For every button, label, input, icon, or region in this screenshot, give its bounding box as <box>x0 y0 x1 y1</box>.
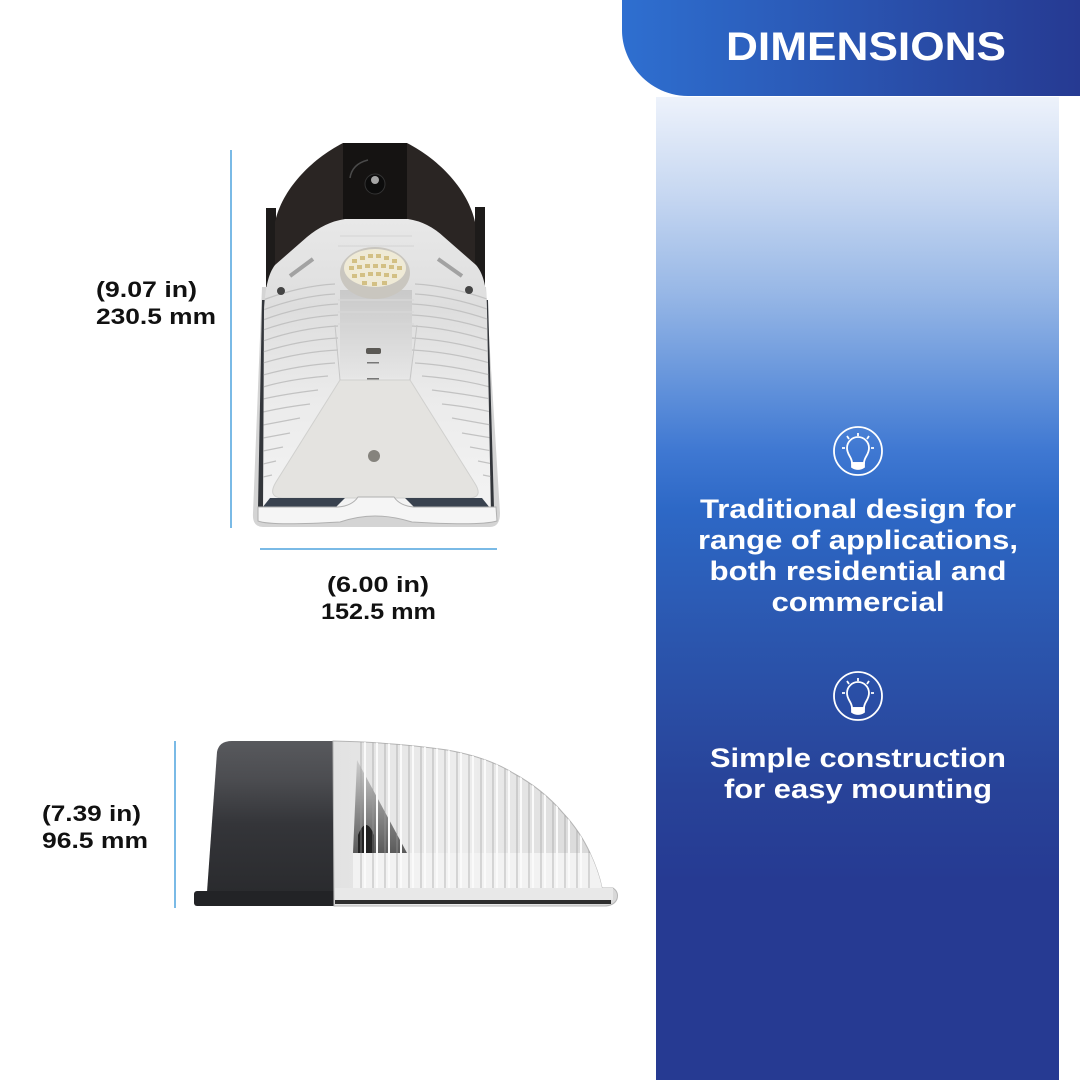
text: traditional design: commercial <box>772 587 944 617</box>
text: simple construction <box>710 743 1006 804</box>
label: width <box>321 572 436 624</box>
text: traditional design: range of applications, <box>698 525 1018 555</box>
product photo: front view of wall light <box>253 143 500 527</box>
icon: light bulb <box>834 672 882 720</box>
dimension line: depth <box>174 741 176 908</box>
label: depth: 96.5 mm <box>42 828 148 853</box>
text: simple construction: for easy mounting <box>724 774 992 804</box>
label: height: 230.5 mm <box>96 304 216 329</box>
central lens band <box>340 290 412 378</box>
label: width: 152.5 mm <box>321 599 436 624</box>
label: width: (6.00 in) <box>327 572 429 597</box>
sensor <box>350 160 385 194</box>
panel: blue gradient column <box>656 97 1059 1080</box>
text: simple construction: Simple construction <box>710 743 1006 773</box>
lower lip <box>258 497 497 524</box>
product photo: side view of wall light <box>194 741 618 906</box>
icon: light bulb <box>834 427 882 475</box>
lens ridges <box>263 236 493 477</box>
side shadow lines <box>290 259 462 276</box>
heading: DIMENSIONS: DIMENSIONS <box>726 25 1006 69</box>
header banner <box>622 0 1080 96</box>
text: traditional design <box>698 494 1018 617</box>
label: height: (9.07 in) <box>96 277 197 302</box>
text: traditional design: Traditional design for <box>700 494 1017 524</box>
label: depth: (7.39 in) <box>42 801 141 826</box>
inner reflector plate <box>273 380 478 498</box>
text: traditional design: both residential and <box>710 556 1006 586</box>
dark gap above lip <box>262 498 490 508</box>
dimension line: height <box>230 150 232 528</box>
LED module <box>340 247 410 299</box>
label: height <box>96 277 216 329</box>
label: depth <box>42 801 148 853</box>
dimension line: width <box>260 548 497 550</box>
